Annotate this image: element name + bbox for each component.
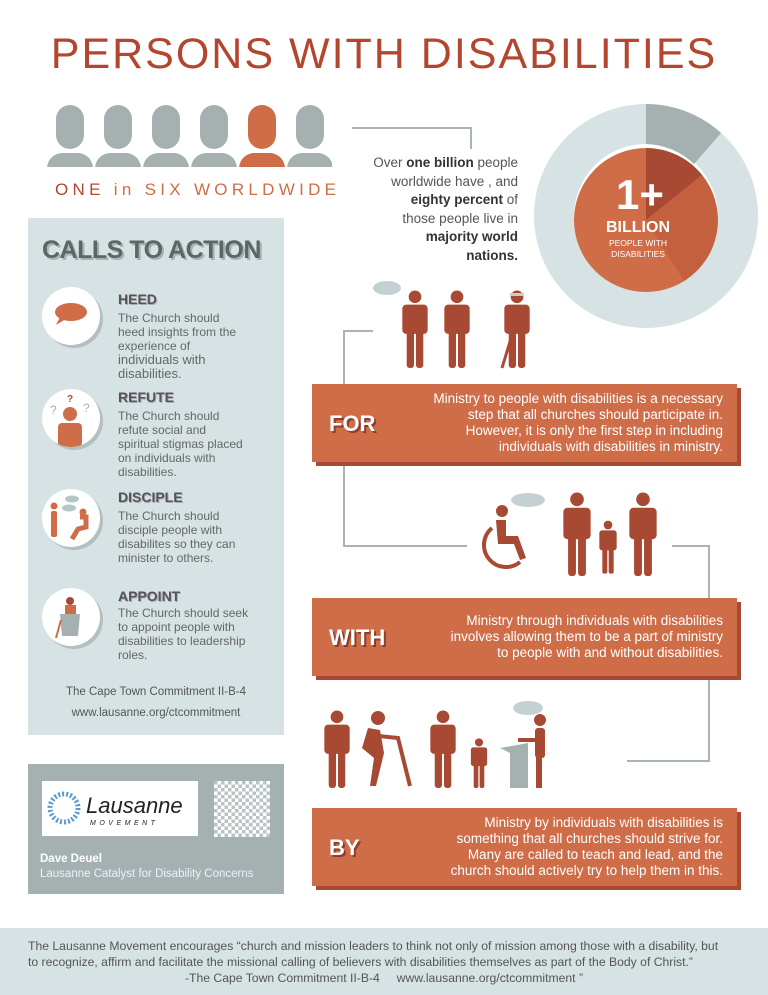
item: disciple: minister to others. xyxy=(118,551,213,565)
stat paragraph: those people live in xyxy=(402,210,518,226)
item: disciple: disciple people with xyxy=(118,523,222,537)
source text: The Cape Town Commitment II-B-4 xyxy=(66,686,246,698)
item: disciple: DISCIPLE xyxy=(118,489,183,505)
banner: for: individuals with disabilities in ministry. xyxy=(499,439,723,454)
item: heed: experience of xyxy=(118,339,190,353)
stat paragraph: Over one billion people xyxy=(373,155,518,170)
qr code xyxy=(214,781,270,837)
banner: for: However, it is only the first step in including xyxy=(466,423,723,438)
banner: with: involves allowing them to be a part of ministry xyxy=(451,629,723,644)
banner: with: WITH xyxy=(329,625,385,650)
banner: by: something that all churches should strive for. xyxy=(457,831,723,846)
item: appoint: The Church should seek xyxy=(118,606,248,620)
item: appoint: APPOINT xyxy=(118,588,180,604)
footer quote: -The Cape Town Commitment II-B-4 www.lausanne.org/ctcommitment ” xyxy=(185,971,583,985)
author name xyxy=(40,853,254,880)
figures: for group xyxy=(373,281,530,368)
connector line xyxy=(352,127,472,149)
banner: by: church should actively try to help them in this. xyxy=(451,863,723,878)
banner: for: Ministry to people with disabilities is a necessary xyxy=(433,391,723,406)
item: appoint: disabilities to leadership xyxy=(118,634,245,648)
item: refute: spiritual stigmas placed xyxy=(118,437,243,451)
donut chart: 1+ billion: DISABILITIES xyxy=(611,249,665,259)
banner: with: to people with and without disabilities. xyxy=(497,645,723,660)
item: refute: ? xyxy=(67,394,73,405)
donut chart: 1+ billion xyxy=(534,104,758,328)
item: refute: REFUTE xyxy=(118,389,174,405)
banner: for: FOR xyxy=(329,411,375,436)
source text: www.lausanne.org/ctcommitment xyxy=(72,707,240,719)
item: heed xyxy=(42,287,236,381)
item: appoint: to appoint people with xyxy=(118,620,235,634)
item: refute: ? xyxy=(83,401,90,415)
item: appoint: roles. xyxy=(118,648,147,662)
banner: with: Ministry through individuals with disabilities xyxy=(466,613,723,628)
banner: by: Many are called to teach and lead, and the xyxy=(468,847,723,862)
connector lines xyxy=(343,330,345,384)
banner: by xyxy=(312,808,737,886)
donut chart: 1+ billion: 1+ xyxy=(616,171,664,218)
subtitle: one in six worldwide: ONE in SIX WORLDWIDE xyxy=(55,180,340,199)
panel: calls to action xyxy=(28,218,284,735)
banner: for xyxy=(312,384,737,462)
item: appoint xyxy=(42,588,248,662)
footer quote: The Lausanne Movement encourages “church and mission leaders to think not only of mission among those with a disability, but xyxy=(28,939,718,953)
item: refute: ? xyxy=(50,403,57,417)
panel: author / logo xyxy=(28,764,284,894)
item: refute: on individuals with xyxy=(118,451,215,465)
icon row: one in six heads xyxy=(47,105,332,167)
item: refute: disabilities. xyxy=(118,465,177,479)
item: heed: The Church should xyxy=(118,311,219,325)
item: heed: disabilities. xyxy=(118,366,182,381)
item: heed: HEED xyxy=(118,291,157,307)
item: refute: The Church should xyxy=(118,409,219,423)
footer quote: to recognize, affirm and facilitate the missional calling of believers with disabilities themselves as part of the Body of Christ.” xyxy=(28,955,693,969)
stat paragraph xyxy=(373,155,518,262)
logo: lausanne movement: Lausanne xyxy=(86,793,183,818)
author name: Dave Deuel xyxy=(40,853,102,865)
author name: Lausanne Catalyst for Disability Concerns xyxy=(40,868,254,880)
item: disciple: disabilites so they can xyxy=(118,537,235,551)
banner: by: BY xyxy=(329,835,360,860)
figures: by group xyxy=(324,701,546,788)
stat paragraph: worldwide have , and xyxy=(391,174,518,188)
logo: lausanne movement xyxy=(42,781,198,836)
footer quote xyxy=(0,928,768,995)
item: disciple xyxy=(42,489,235,565)
item: heed: individuals with xyxy=(118,352,205,367)
banner: by: Ministry by individuals with disabilities is xyxy=(484,815,723,830)
stat paragraph: eighty percent of xyxy=(411,192,518,207)
item: refute xyxy=(42,389,243,479)
heading: calls to action: CALLS TO ACTION xyxy=(42,236,261,264)
source text xyxy=(66,686,246,719)
stat paragraph: nations. xyxy=(466,248,518,262)
banner: for: step that all churches should participate in. xyxy=(468,407,723,422)
item: heed: heed insights from the xyxy=(118,325,236,339)
figures: with group xyxy=(482,492,657,576)
banner: with xyxy=(312,598,737,676)
logo: lausanne movement: MOVEMENT xyxy=(90,820,158,827)
item: disciple: The Church should xyxy=(118,509,219,523)
title: PERSONS WITH DISABILITIES xyxy=(51,30,717,78)
stat paragraph: majority world xyxy=(426,229,518,244)
donut chart: 1+ billion: BILLION xyxy=(606,219,670,236)
item: refute: refute social and xyxy=(118,423,206,437)
donut chart: 1+ billion: PEOPLE WITH xyxy=(609,238,667,248)
